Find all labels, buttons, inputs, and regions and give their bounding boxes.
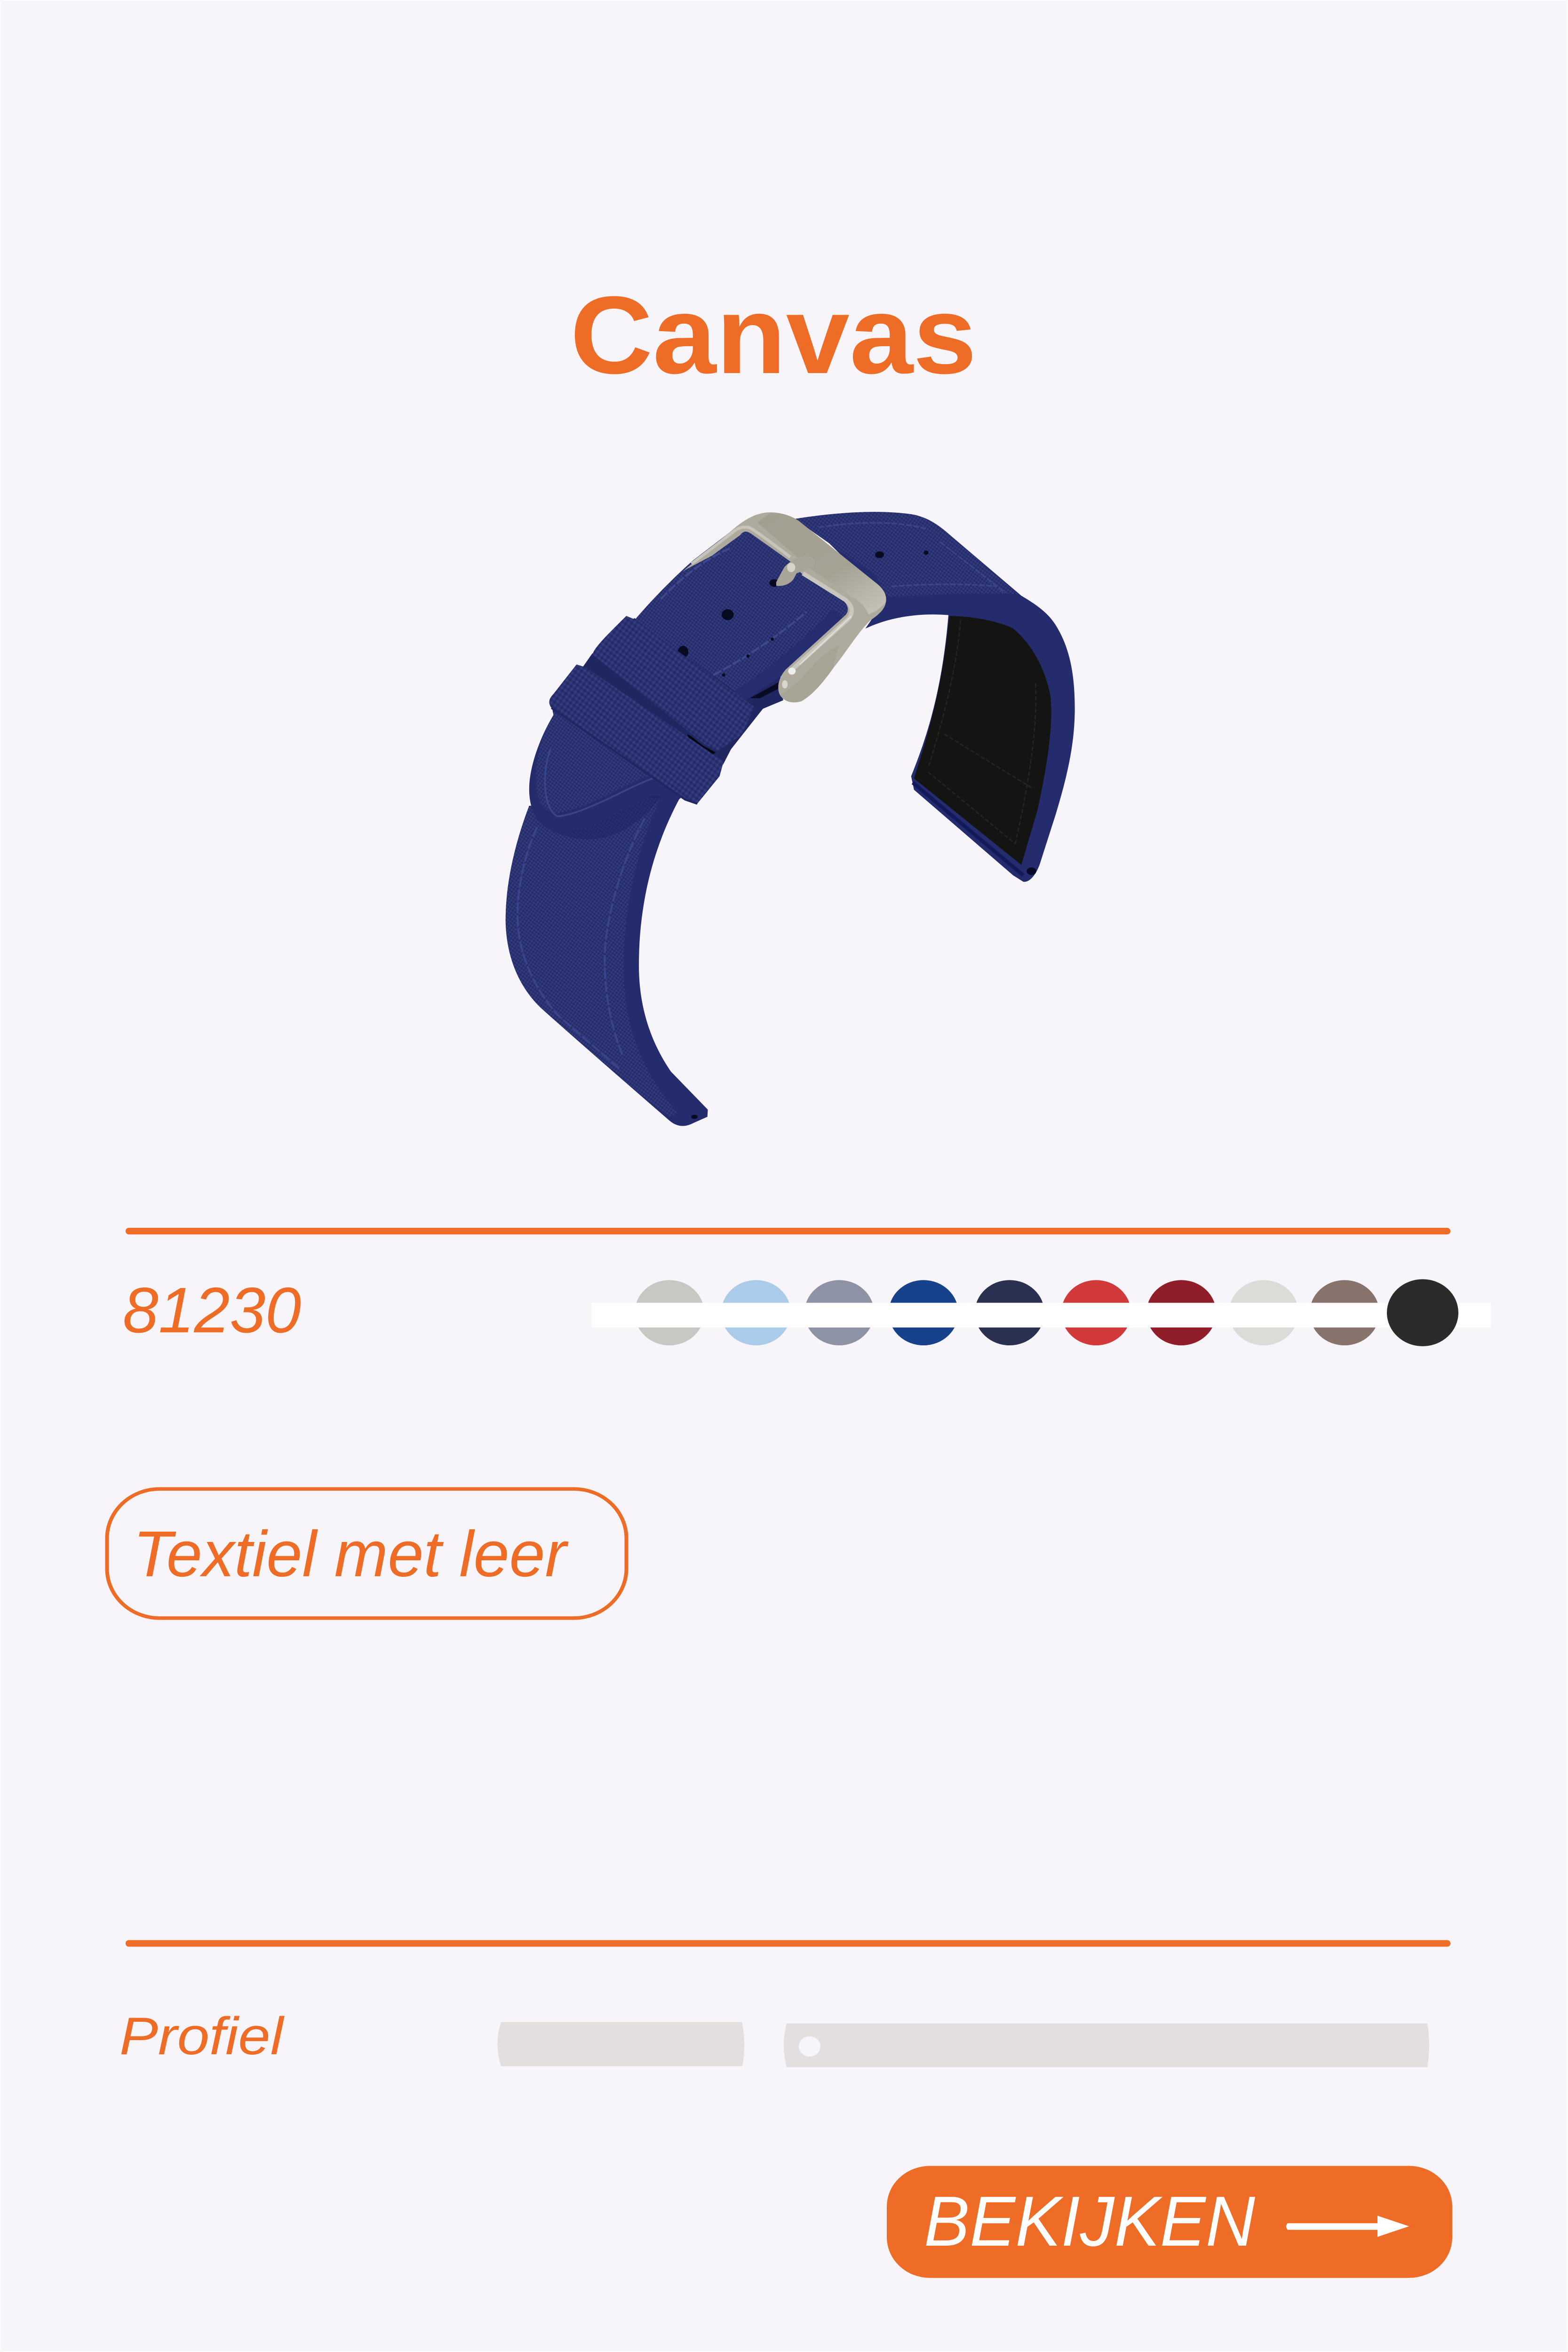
divider line top bbox=[126, 1228, 1450, 1234]
buckle pin bbox=[776, 556, 815, 586]
divider line bottom bbox=[126, 1940, 1450, 1947]
strap: lower left section bbox=[506, 738, 730, 1126]
strap holes bbox=[875, 550, 929, 558]
material tag: Textiel met leer bbox=[133, 1518, 569, 1590]
product image: watch strap bbox=[506, 512, 1075, 1126]
buckle bbox=[682, 512, 886, 702]
strap: upper section through buckle bbox=[554, 527, 861, 804]
profile bar long bbox=[784, 2024, 1429, 2067]
article number: 81230 bbox=[123, 1274, 301, 1346]
strap: right section with black lining bbox=[795, 512, 1075, 882]
profile label: Profiel bbox=[119, 2007, 285, 2066]
button: BEKIJKEN bbox=[924, 2182, 1255, 2261]
material tag bbox=[107, 1489, 627, 1618]
colour swatches bbox=[591, 1279, 1491, 1346]
icon: arrow bbox=[1286, 2216, 1409, 2237]
strap: keepers and tip bbox=[529, 616, 754, 833]
button bbox=[887, 2166, 1452, 2278]
profile bar short bbox=[498, 2022, 744, 2066]
title: Canvas bbox=[570, 274, 977, 397]
